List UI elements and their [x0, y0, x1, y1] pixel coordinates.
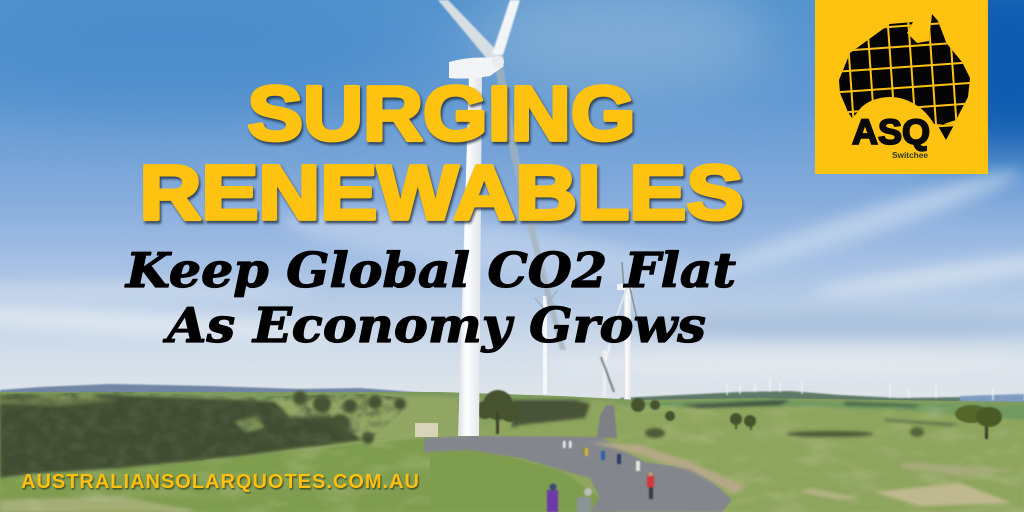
title: surging renewables: SURGING	[248, 71, 636, 157]
main turbine	[438, 0, 566, 436]
title: surging renewables: RENEWABLES	[140, 150, 744, 236]
logo sub-brand: Switchee	[892, 151, 929, 160]
dark treeline on left	[0, 391, 406, 478]
land	[0, 392, 1024, 512]
logo: ASQ	[815, 0, 988, 174]
roads	[424, 405, 745, 512]
icon: large tree at right	[955, 405, 1002, 439]
website url: AUSTRALIANSOLARQUOTES.COM.AU	[21, 471, 419, 493]
trees near main tower and right field	[476, 390, 1002, 439]
subtitle: As Economy Grows	[163, 298, 706, 354]
title: surging renewables: SURGING	[249, 74, 637, 160]
distant hills	[0, 384, 1024, 410]
small distant turbines	[727, 378, 993, 400]
title: surging renewables	[140, 71, 745, 238]
turbine: small far tower	[601, 344, 614, 396]
title: surging renewables: RENEWABLES	[141, 152, 745, 238]
turbine: far left tower	[535, 290, 558, 394]
subtitle: Keep Global CO2 Flat	[124, 243, 736, 299]
tree canopy mottling	[0, 392, 405, 470]
dirt patches and scrub on right	[512, 400, 1020, 506]
runners	[547, 441, 654, 512]
logo wordmark: ASQ	[852, 113, 930, 152]
website url: AUSTRALIANSOLARQUOTES.COM.AU	[22, 472, 420, 494]
icon: Australia solar panel map	[839, 14, 970, 140]
background: sky	[0, 0, 1024, 400]
turbine: second tower	[616, 262, 642, 414]
concrete hut	[415, 423, 438, 437]
subtitle	[124, 243, 736, 354]
